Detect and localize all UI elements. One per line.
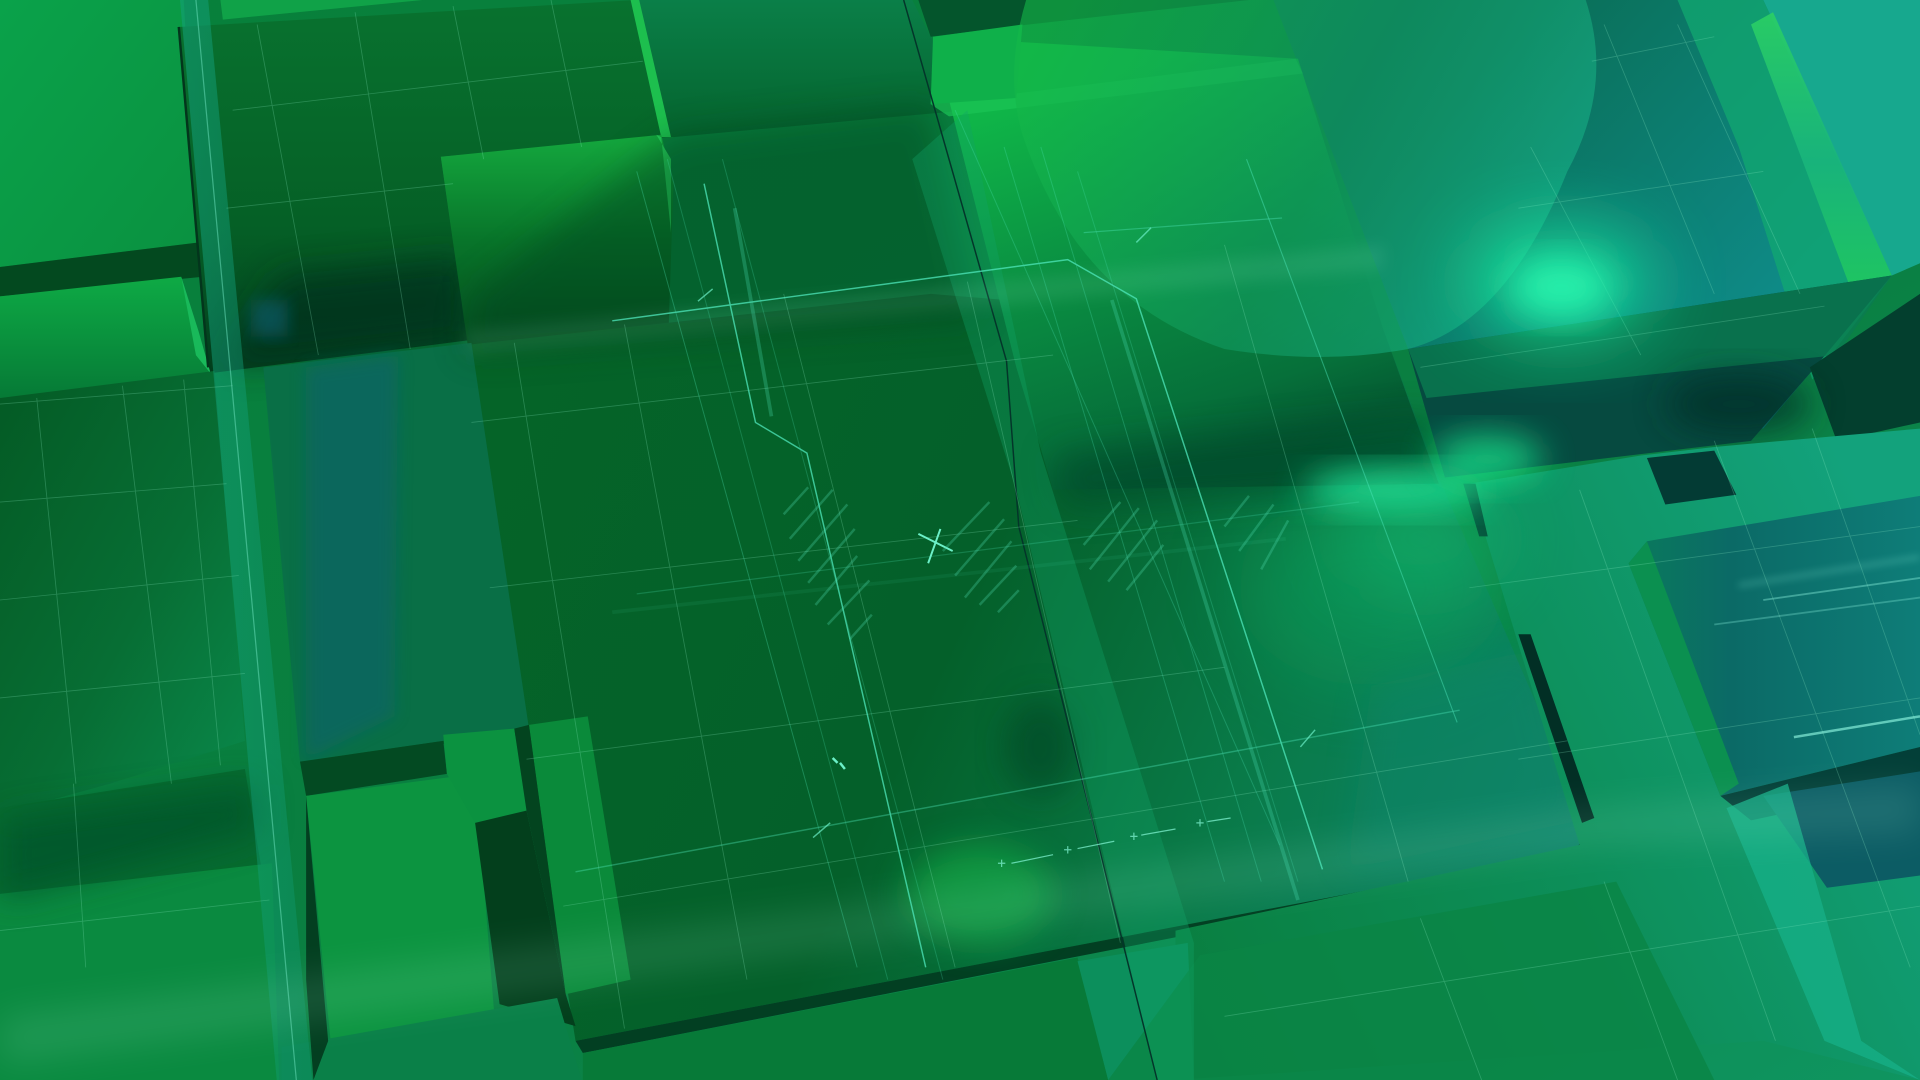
panel: vertical glass strip xyxy=(179,0,328,1080)
shape: translucent dome xyxy=(1014,0,1596,357)
panel: right glass edge xyxy=(1408,0,1920,478)
tick marks row xyxy=(998,818,1231,867)
panel: central vertical glass strip xyxy=(904,0,1194,1080)
panel: upper central glass plate xyxy=(931,24,1445,508)
hatch pattern xyxy=(784,487,1288,639)
panel: right teal block xyxy=(1629,496,1920,1080)
panel: upper middle column xyxy=(639,0,967,137)
panel: lower right floor xyxy=(1176,429,1920,1080)
icon: crosshair marks xyxy=(698,228,1315,838)
panel: central large plate xyxy=(263,104,1592,1053)
panel: lower left blocks xyxy=(282,716,1714,1080)
glows xyxy=(1304,227,1653,594)
panel: upper right teal floor xyxy=(918,0,1892,429)
right panel light streaks xyxy=(1714,557,1920,737)
panel: top left bright block xyxy=(0,0,203,296)
panel: bright green front block xyxy=(441,135,673,345)
panel: upper left dark slab xyxy=(179,0,673,373)
horizontal light streaks xyxy=(0,245,1920,1065)
circuit lines xyxy=(576,110,1460,980)
panel: left mid block xyxy=(0,277,279,1080)
